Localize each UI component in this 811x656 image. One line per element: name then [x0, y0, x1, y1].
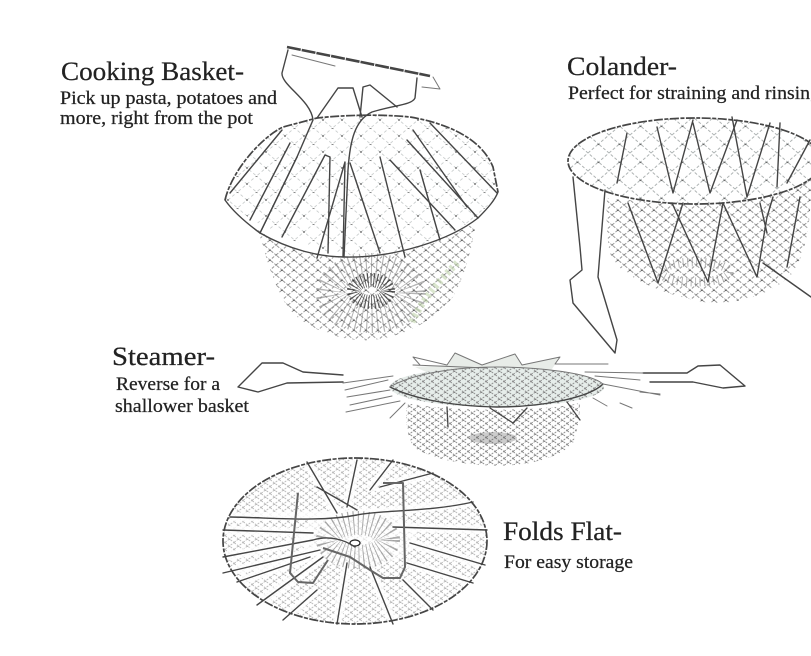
flat basket handle — [290, 483, 405, 583]
colander inner mesh — [568, 118, 811, 204]
flat basket mesh — [223, 458, 487, 624]
heading: folds flat: Folds Flat- — [503, 517, 622, 546]
steamer right handle — [643, 365, 745, 388]
text: steamer description: Reverse for a — [116, 374, 221, 395]
steamer folded spokes — [343, 353, 660, 427]
basket lower bowl mesh — [258, 222, 476, 340]
text: cooking basket description: Pick up pasta, potatoes and — [60, 88, 278, 109]
steamer top flaps — [415, 353, 560, 378]
colander rim — [568, 118, 811, 204]
basket dome mesh — [225, 115, 498, 256]
illustration: folds flat — [223, 458, 487, 624]
illustration: colander — [568, 117, 811, 353]
text: folds flat description: For easy storage — [504, 552, 633, 573]
text: cooking basket description: more, right from the pot — [60, 108, 254, 129]
illustration: steamer — [238, 353, 745, 466]
flat basket white gaps — [223, 460, 487, 624]
heading: steamer: Steamer- — [112, 342, 215, 371]
colander handle — [570, 177, 617, 353]
text: colander description: Perfect for straining and rinsing — [568, 83, 811, 104]
text: steamer description — [115, 374, 250, 417]
steamer bowl mesh — [406, 403, 580, 466]
steamer rim — [390, 384, 603, 407]
flat basket rim — [223, 458, 487, 624]
basket handle — [260, 47, 440, 257]
flat basket spokes — [223, 460, 487, 624]
text: steamer description: shallower basket — [115, 396, 250, 417]
illustration: cooking basket — [225, 47, 498, 340]
heading: colander: Colander- — [567, 52, 677, 81]
steamer left handle — [238, 363, 343, 392]
steamer top mesh — [390, 367, 604, 407]
colander wires — [617, 117, 811, 297]
heading: cooking basket: Cooking Basket- — [61, 57, 244, 86]
colander bowl mesh — [607, 180, 811, 303]
text: cooking basket description — [60, 88, 278, 129]
basket rim — [225, 115, 498, 200]
basket wire spokes — [230, 123, 497, 258]
flat basket centre — [300, 507, 416, 567]
